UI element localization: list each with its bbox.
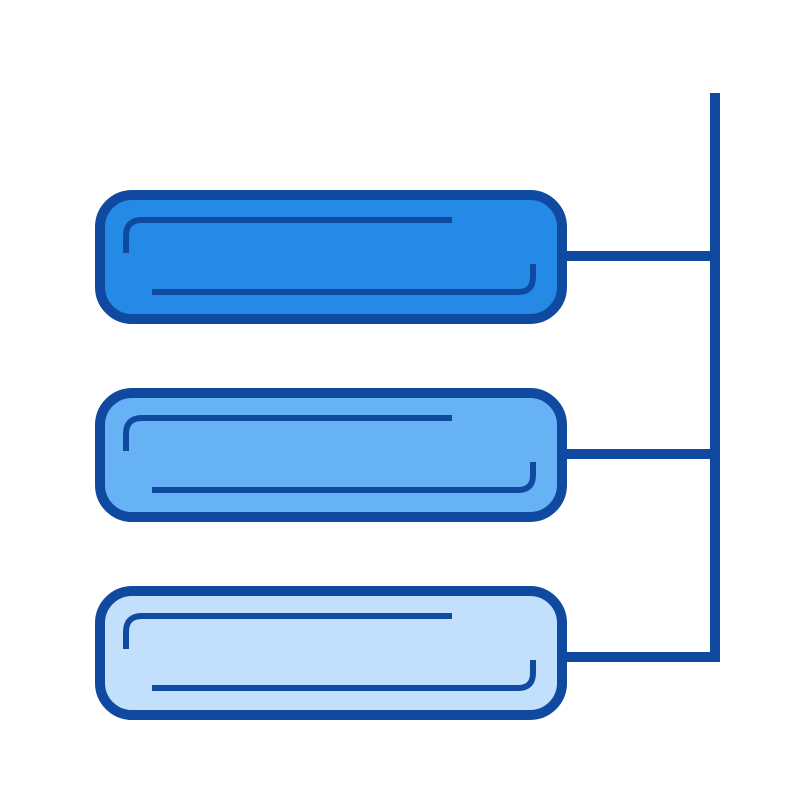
bar 3 light — [100, 591, 562, 715]
bar 1 dark — [100, 195, 562, 319]
bar 2 medium — [100, 393, 562, 517]
connector bracket — [560, 93, 715, 657]
